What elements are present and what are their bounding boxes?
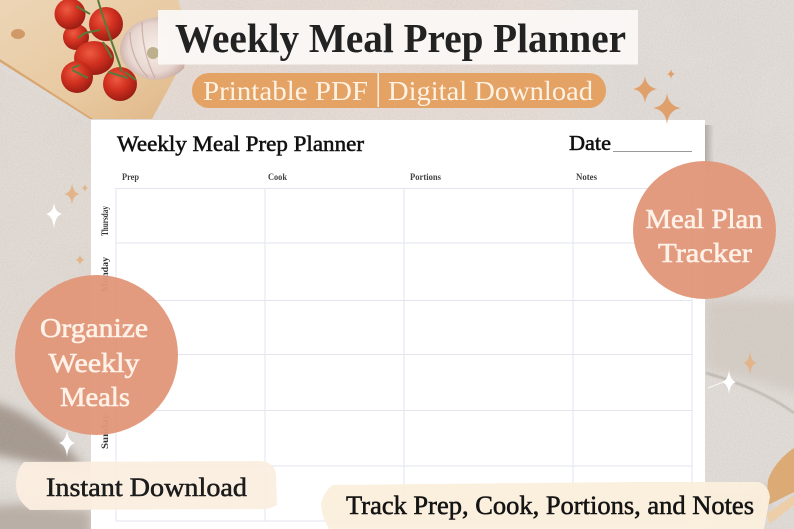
label: track prep, cook, portions and notes: Track Prep, Cook, Portions, and Notes — [346, 491, 754, 520]
tomato vine — [72, 0, 136, 80]
cutting board — [0, 0, 192, 119]
callout: organize weekly meals: Meals — [60, 382, 130, 412]
tomatoes — [54, 0, 137, 101]
callout: organize weekly meals: Weekly — [48, 348, 140, 378]
column headers: Prep — [122, 172, 139, 182]
column headers: Portions — [410, 172, 441, 182]
row labels: Monday — [101, 257, 111, 292]
row labels — [101, 206, 111, 449]
column headers: Cook — [268, 172, 287, 182]
date field: Date — [569, 131, 611, 155]
column headers — [122, 172, 597, 182]
label: instant download — [16, 461, 277, 510]
label: instant download: Instant Download — [46, 473, 247, 502]
garlic bulb — [120, 17, 185, 80]
subtitle pill: Digital Download — [388, 76, 594, 106]
subtitle pill — [192, 73, 606, 108]
icon: sparkles lower right — [708, 351, 757, 394]
callout: organize weekly meals — [15, 275, 178, 435]
callout: meal plan tracker — [633, 161, 776, 299]
planner sheet — [91, 120, 714, 529]
subtitle pill: Printable PDF — [203, 76, 368, 106]
column headers: Notes — [576, 172, 597, 182]
icon: sparkles left side — [46, 183, 88, 265]
sheet heading: Weekly Meal Prep Planner — [117, 131, 365, 156]
date field — [569, 131, 692, 155]
grid table — [116, 188, 692, 521]
icon: white sparkle over circle — [59, 430, 75, 457]
callout: organize weekly meals: Organize — [40, 313, 148, 343]
row labels: Sunday — [101, 414, 111, 449]
row labels: Thursday — [101, 206, 111, 236]
callout: meal plan tracker: Meal Plan — [646, 204, 763, 234]
icon: wooden spoon — [766, 448, 794, 524]
icon: orange sparkles top right — [633, 69, 681, 124]
callout: meal plan tracker: Tracker — [658, 238, 752, 268]
title banner: Weekly Meal Prep Planner — [175, 15, 626, 61]
label: track prep, cook, portions and notes — [321, 482, 770, 529]
photo: wooden cutting board with tomatoes and garlic — [0, 0, 192, 119]
